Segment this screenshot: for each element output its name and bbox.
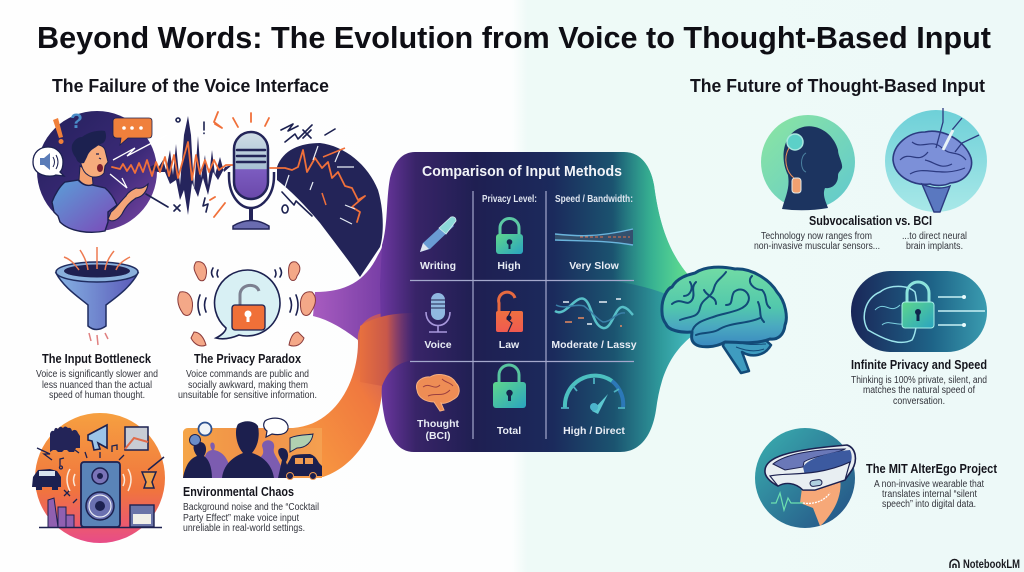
green upper stream <box>612 152 692 306</box>
flow: navy noisy band from microphone <box>270 143 383 277</box>
dark silhouettes <box>183 421 292 478</box>
text: environmental chaos description <box>183 502 319 534</box>
red inflow fade <box>360 313 414 386</box>
speaker <box>81 462 120 527</box>
text: alterego description: speech” into digital data. <box>882 499 976 510</box>
icon: total lock <box>493 365 526 408</box>
speech bubbles <box>190 418 313 452</box>
icon: slow narrow channel <box>555 229 633 245</box>
column headers: Speed / Bandwidth: <box>555 194 633 205</box>
text: infinite privacy description <box>851 375 987 407</box>
text: environmental chaos description: Background noise and the “Cocktail <box>183 502 319 513</box>
text: input bottleneck description: less nuanced than the actual <box>42 380 152 391</box>
goblet and whisk <box>142 457 164 488</box>
face <box>800 478 841 526</box>
icon: orange brain <box>416 375 459 411</box>
label: thought bci: (BCI) <box>425 430 451 442</box>
icon: main brain <box>662 267 786 373</box>
text: brain implants <box>902 231 967 252</box>
panel title: Comparison of Input Methods <box>422 163 622 180</box>
inner strap <box>773 449 845 470</box>
text: alterego description: A non-invasive wearable that <box>874 479 984 490</box>
purple background figures <box>205 440 285 478</box>
label: voice: Voice <box>424 339 452 351</box>
car <box>32 469 61 490</box>
text: privacy paradox description: unsuitable for sensitive information. <box>178 390 317 401</box>
text: muscular sensors: non-invasive muscular sensors... <box>754 241 880 252</box>
icon: glowing brain lock pill <box>851 271 987 352</box>
label: writing: Writing <box>420 260 456 272</box>
text: alterego description <box>874 479 984 510</box>
waveform: voice noise <box>110 112 335 217</box>
megaphone <box>88 425 107 450</box>
label: total: Total <box>497 425 521 437</box>
heading: infinite privacy and speed: Infinite Privacy and Speed <box>851 357 987 372</box>
label: thought bci <box>417 418 459 442</box>
visor band <box>765 445 855 490</box>
label: high: High <box>497 260 521 272</box>
icon: head with muscular sensor <box>761 115 855 210</box>
text: alterego description: translates internal “silent <box>882 489 977 500</box>
text: privacy paradox description: Voice commands are public and <box>186 369 309 380</box>
heading: the privacy paradox: The Privacy Paradox <box>194 351 302 366</box>
text: infinite privacy description: conversation. <box>893 396 945 407</box>
label: moderate lossy: Moderate / Lassy <box>551 339 637 351</box>
text: privacy paradox description <box>178 369 317 401</box>
text: environmental chaos description: unreliable in real-world settings. <box>183 523 305 534</box>
text: infinite privacy description: matches the natural speed of <box>863 385 975 396</box>
text: input bottleneck description: speed of human thought. <box>49 390 145 401</box>
icon: broken red lock <box>496 292 523 332</box>
picture frame <box>125 427 148 450</box>
exclamation mark <box>53 118 64 144</box>
icon: alterego headset <box>755 428 855 528</box>
hair <box>72 131 106 163</box>
ground line <box>39 526 162 528</box>
icon: microphone <box>426 293 450 332</box>
face <box>80 144 108 177</box>
illustration: frustrated speaker <box>33 110 157 232</box>
label: low: Law <box>499 339 520 351</box>
cerebellum and stem <box>723 335 771 373</box>
hair dome <box>803 448 850 482</box>
column headers: Privacy Level: <box>482 194 537 205</box>
lightning and music notes <box>37 445 124 503</box>
heading: failure of the voice interface: The Failure of the Voice Interface <box>52 75 329 96</box>
icon: studio microphone <box>229 132 274 229</box>
question mark: ? <box>70 110 83 133</box>
icon: privacy lock and ears <box>178 262 315 346</box>
eye and mouth <box>96 154 101 159</box>
illustration: noisy environment <box>32 413 165 543</box>
car <box>284 454 322 480</box>
text: muscular sensors: Technology now ranges from <box>761 231 872 242</box>
flow: orange stream to panel <box>290 312 395 477</box>
icon: funnel <box>56 247 138 345</box>
flow: purple stream to panel <box>313 170 402 340</box>
heading: future of thought-based input: The Future of Thought-Based Input <box>690 75 985 96</box>
text: input bottleneck description: Voice is significantly slower and <box>36 369 158 380</box>
neck <box>79 166 93 185</box>
icon: lossy wave <box>555 299 633 328</box>
shirt <box>52 180 117 232</box>
panel background and brain stream <box>380 152 692 452</box>
text: brain implants: brain implants. <box>906 241 963 252</box>
chat bubble <box>113 118 152 145</box>
icon: gauge <box>561 376 625 414</box>
text: infinite privacy description: Thinking is 100% private, silent, and <box>851 375 987 386</box>
heading: mit alterego project: The MIT AlterEgo Project <box>866 461 998 476</box>
icon: brain with implants <box>885 108 987 212</box>
text: privacy paradox description: socially awkward, making them <box>188 380 308 391</box>
icon: pen <box>420 217 456 252</box>
illustration: crowd and traffic <box>183 418 322 480</box>
label: thought bci: Thought <box>417 418 459 430</box>
heading: subvocalisation vs bci: Subvocalisation vs. BCI <box>809 213 932 228</box>
text: input bottleneck description <box>36 369 158 401</box>
books <box>48 498 74 527</box>
navy circle <box>37 111 157 231</box>
raised arm <box>108 184 148 221</box>
crowd group <box>50 426 80 452</box>
title: Beyond Words: The Evolution from Voice to Thought-Based Input <box>37 20 991 55</box>
speaker bubble <box>33 147 64 176</box>
label: very slow: Very Slow <box>569 260 620 272</box>
icon: green lock high <box>496 218 523 254</box>
person <box>52 131 148 232</box>
text: environmental chaos description: Party Effect” make voice input <box>183 513 299 524</box>
text: muscular sensors <box>754 231 880 252</box>
cerebrum <box>662 267 786 347</box>
label: high direct: High / Direct <box>563 425 625 437</box>
heading: environmental chaos: Environmental Chaos <box>183 484 294 499</box>
column headers <box>482 194 633 205</box>
heading: the input bottleneck: The Input Bottleneck <box>42 351 152 366</box>
comparison panel <box>360 152 692 452</box>
text: brain implants: ...to direct neural <box>902 231 967 242</box>
stove <box>130 505 154 527</box>
